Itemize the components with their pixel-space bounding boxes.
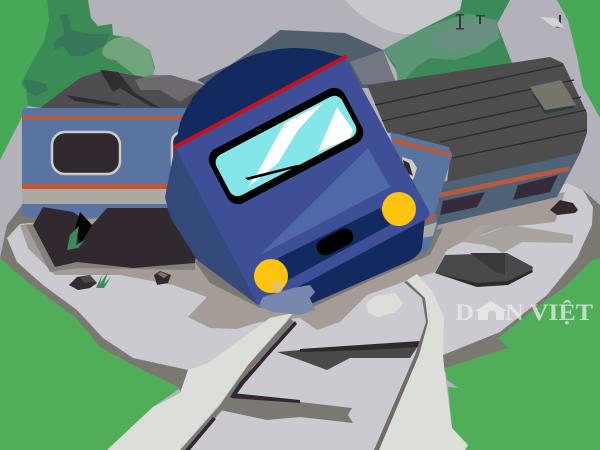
red stripe: [175, 57, 345, 147]
roof hatch: [530, 80, 576, 114]
front face: [175, 57, 430, 305]
windscreen reflections: [248, 103, 353, 187]
roof ribs: [375, 65, 587, 158]
house icon: [475, 301, 507, 320]
watermark: Dan Viet logo: D: [455, 300, 474, 325]
smoke: dark plume behind train: [197, 30, 398, 90]
watermark: Dan Viet logo: N VIỆT: [505, 300, 593, 325]
windscreen glass: [212, 93, 360, 199]
carriage wall: [425, 153, 580, 240]
left rail: [107, 313, 297, 450]
wall windows: [440, 175, 558, 215]
track bed cracks: [220, 341, 420, 423]
rocks under left carriage: [26, 207, 200, 272]
grass: bottom right: [445, 258, 600, 450]
windscreen frame: [205, 84, 367, 208]
grass: bottom left: [0, 258, 180, 450]
front highlight: [260, 148, 390, 255]
utility poles: [456, 14, 564, 30]
right carriage: [367, 57, 587, 240]
grey rock shadow: [26, 225, 195, 272]
wall stripe: [438, 166, 570, 198]
grey shade beneath train: [195, 228, 443, 308]
window two: [172, 132, 202, 174]
rock: far right: [550, 200, 578, 215]
small rock centre: [154, 271, 171, 285]
ground rim: dark edge: [0, 183, 600, 450]
middle carriage: [390, 132, 452, 254]
grille: [314, 226, 356, 258]
watermark: Dan Viet logo: [455, 300, 593, 325]
bush: left: [21, 0, 155, 108]
dust on bumper: [260, 281, 315, 315]
roof: [367, 57, 587, 182]
lower stripe: [22, 183, 172, 189]
pale cloud at top: [345, 0, 480, 34]
wiper: [245, 165, 303, 180]
headlight left: [254, 259, 288, 293]
small rock left: [69, 275, 97, 290]
grass tuft: [96, 272, 111, 288]
window one: [52, 132, 120, 174]
top stripe: [22, 115, 197, 120]
lower stripe and band: [422, 214, 437, 224]
debris: dark rock right: [435, 253, 533, 287]
shadow under wreck: [20, 192, 565, 330]
grass: top left: [0, 0, 60, 160]
headlight right: [382, 192, 416, 226]
dust patch: [366, 293, 403, 317]
smoke over right bush: [383, 14, 500, 88]
bush: right: [383, 0, 512, 90]
left carriage: [22, 108, 202, 217]
navy roof: [175, 48, 345, 147]
debris: twisted rail: [462, 225, 573, 253]
smoke over bush: [102, 37, 155, 92]
rock pile on roof: [40, 70, 205, 108]
navy lower skirt: [270, 218, 425, 303]
cloud near right pole: [540, 17, 565, 28]
right rail: [374, 274, 468, 450]
grass: top right: [557, 0, 600, 118]
dark side panel: [165, 147, 280, 305]
bush shading: [24, 14, 110, 96]
navy grille band: [278, 208, 390, 280]
locomotive: [165, 48, 430, 315]
beige band: [22, 189, 172, 204]
ground: light grey: [7, 183, 593, 450]
